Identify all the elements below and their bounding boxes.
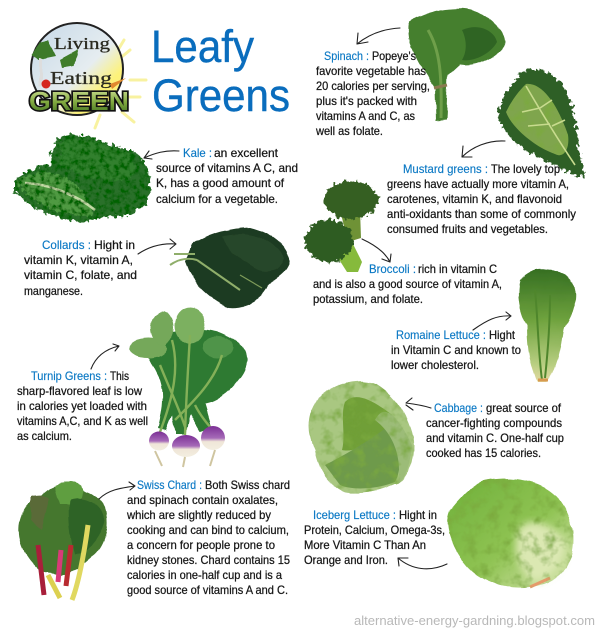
callout: broccoli: potassium, and folate. [313, 292, 423, 306]
callout: turnip greens: vitamins A,C, and K as well [17, 414, 148, 428]
callout: swiss chard: cooking and can bind to calcium, [127, 523, 289, 537]
photo: mustard greens [498, 69, 584, 177]
callout: swiss chard: a concern for people prone to [127, 538, 275, 552]
callout: cabbage [406, 398, 564, 460]
callout: turnip greens: Turnip Greens : [31, 369, 107, 383]
callout: collards: vitamin K, vitamin A, [24, 253, 133, 267]
callout: kale [144, 146, 298, 206]
callout: collards [24, 238, 176, 298]
callout: swiss chard: which are slightly reduced by [126, 508, 271, 522]
icon: logo circle [31, 23, 123, 115]
callout: romaine lettuce: Romaine Lettuce : [396, 328, 486, 342]
callout: iceberg lettuce: Orange and Iron. [304, 553, 388, 567]
title: Greens [152, 70, 290, 121]
callout: iceberg lettuce: Protein, Calcium, Omega-3s, [304, 523, 445, 537]
arrow: to turnip greens [91, 344, 119, 369]
callout: mustard greens: Mustard greens : [403, 162, 488, 176]
title: Leafy [151, 21, 254, 72]
icon: carrot [110, 78, 126, 89]
callout: kale: Kale : [183, 146, 212, 160]
photo: kale [13, 135, 150, 222]
callout: cabbage: Cabbage : [434, 401, 483, 415]
callout: turnip greens: as calcium. [17, 429, 72, 443]
callout: turnip greens: This [110, 369, 129, 383]
callout: kale: source of vitamins A C, and [156, 161, 298, 175]
callout: cabbage: great source of [486, 401, 562, 415]
callout: iceberg lettuce [304, 508, 447, 569]
photo: iceberg lettuce [448, 479, 573, 588]
photo: broccoli [305, 181, 378, 272]
callout: iceberg lettuce: Hight in [399, 508, 437, 522]
callout: collards: Hight in [94, 238, 135, 252]
arrow: to collards [138, 239, 176, 254]
callout: mustard greens: consumed fruits and vegetables. [387, 222, 548, 236]
arrow: to kale [144, 151, 179, 159]
callout: cabbage: cancer-fighting compounds [426, 416, 562, 430]
icon: tomato [42, 80, 50, 88]
arrow: to cabbage [406, 398, 431, 410]
arrow: to swiss chard [99, 482, 135, 499]
logo word: GREEN: GREEN [29, 86, 129, 116]
arrow: to iceberg lettuce [398, 558, 447, 569]
callout: iceberg lettuce: Iceberg Lettuce : [313, 508, 396, 522]
callout: mustard greens: carotenes, vitamin K, and flavonoid [387, 192, 562, 206]
callout: swiss chard: and spinach contain oxalates, [127, 493, 278, 507]
callout: turnip greens: in calories yet loaded with [17, 399, 147, 413]
arrow: to broccoli [362, 239, 391, 262]
callout: swiss chard: Both Swiss chard [205, 478, 290, 492]
callout: spinach: well as folate. [315, 124, 383, 138]
callout: spinach: vitamins A and C, as [316, 109, 415, 123]
callout: swiss chard: good source of vitamins A and C. [127, 583, 288, 597]
callout: spinach [315, 28, 430, 138]
arrow: to romaine lettuce [473, 312, 511, 330]
callout: spinach: 20 calories per serving, [316, 79, 430, 93]
callout: turnip greens: sharp-flavored leaf is low [17, 384, 142, 398]
logo word: Living: Living [54, 34, 111, 53]
callout: broccoli: Broccoli : [369, 262, 416, 276]
callout: broccoli: and is also a good source of vitamin A, [313, 277, 502, 291]
callout: iceberg lettuce: More Vitamin C Than An [304, 538, 426, 552]
callout: kale: an excellent [214, 146, 279, 160]
callout: mustard greens: The lovely top [491, 162, 560, 176]
title [151, 21, 290, 121]
photo: turnip greens [129, 308, 247, 467]
callout: cabbage: and vitamin C. One-half cup [426, 431, 564, 445]
callout: romaine lettuce: lower cholesterol. [391, 358, 479, 372]
arrow: to mustard greens [462, 141, 505, 157]
callout: spinach: plus it's packed with [316, 94, 417, 108]
callout: mustard greens: greens have actually more vitamin A, [387, 177, 569, 191]
photo: collards [170, 227, 290, 307]
icon: turnip roots [149, 426, 225, 467]
callout: kale: K, has a good amount of [156, 176, 285, 190]
callout: swiss chard: calories in one-half cup and is a [127, 568, 282, 582]
callout: swiss chard [99, 478, 290, 597]
callout: romaine lettuce: Hight [489, 328, 516, 342]
callout: romaine lettuce [391, 312, 521, 372]
callout: cabbage: cooked has 15 calories. [426, 446, 541, 460]
callout: spinach: favorite vegetable has [316, 64, 426, 78]
photo: cabbage [310, 381, 414, 493]
logo: Living and Eating Green [29, 23, 146, 128]
icon: sun rays [95, 40, 146, 128]
callout: collards: manganese. [24, 284, 83, 298]
arrow: to spinach [357, 28, 400, 44]
logo word: Eating: Eating [50, 68, 112, 88]
callout: broccoli [313, 239, 502, 306]
callout: mustard greens: anti-oxidants than some of commonly [387, 207, 576, 221]
callout: mustard greens [387, 141, 576, 236]
callout: kale: calcium for a vegetable. [156, 192, 278, 206]
icon: logo tree [31, 40, 78, 86]
footer source url: alternative-energy-gardning.blogspot.com [354, 613, 595, 628]
callout: romaine lettuce: in Vitamin C and known to [391, 343, 521, 357]
photo: spinach [408, 8, 505, 121]
callout: collards: vitamin C, folate, and [24, 268, 137, 282]
callout: collards: Collards : [42, 238, 91, 252]
photo: romaine lettuce [518, 269, 576, 382]
callout: spinach: Spinach : [324, 49, 369, 63]
callout: swiss chard: Swiss Chard : [137, 478, 202, 492]
callout: swiss chard: kidney stones. Chard contains 15 [127, 553, 290, 567]
callout: spinach: Popeye's [372, 49, 416, 63]
callout: turnip greens [17, 344, 148, 443]
photo: swiss chard [19, 482, 108, 600]
callout: broccoli: rich in vitamin C [418, 262, 497, 276]
